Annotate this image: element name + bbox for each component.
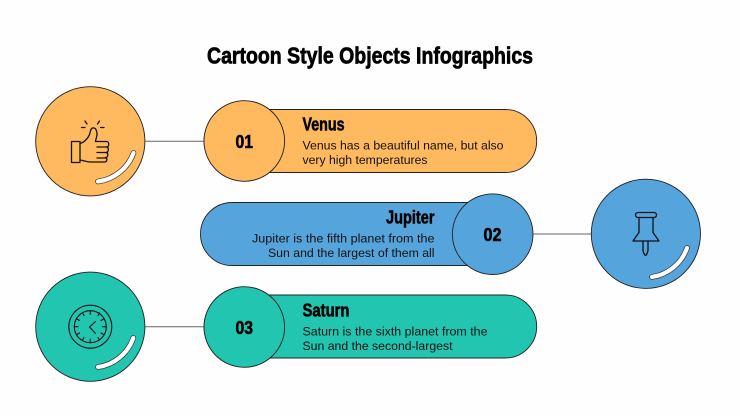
number circle 2 <box>452 194 533 274</box>
number 01: 01 <box>236 131 253 152</box>
icon: push pin <box>633 212 659 256</box>
pill 2 <box>200 202 532 266</box>
body Jupiter: Sun and the largest of them all <box>268 246 434 260</box>
body Saturn: Saturn is the sixth planet from the <box>302 324 488 338</box>
connector 2 <box>532 233 592 235</box>
icon circle 1 <box>36 87 145 196</box>
icon circle 3 <box>36 272 145 381</box>
connector 1 <box>145 140 205 142</box>
item 1: Venus <box>36 87 537 196</box>
heading Venus: Venus <box>302 114 344 134</box>
item 3: Saturn <box>36 272 537 381</box>
body Saturn: Sun and the second-largest <box>302 339 453 353</box>
heading Saturn: Saturn <box>302 300 350 320</box>
connector 3 <box>145 326 205 328</box>
body Venus: Venus has a beautiful name, but also <box>302 138 504 152</box>
icon: clock <box>69 305 112 348</box>
item 2: Jupiter <box>200 179 701 288</box>
body Venus: very high temperatures <box>302 153 428 167</box>
title: Cartoon Style Objects Infographics <box>207 42 533 68</box>
number circle 3 <box>204 287 285 367</box>
icon: thumbs up <box>72 121 109 162</box>
number 02: 02 <box>484 224 502 245</box>
body Jupiter: Jupiter is the fifth planet from the <box>252 232 435 246</box>
icon circle 2 <box>591 179 701 288</box>
pill 1 <box>204 110 537 172</box>
number circle 1 <box>204 101 285 181</box>
pill 3 <box>204 295 537 358</box>
heading Jupiter: Jupiter <box>386 208 434 228</box>
number 03: 03 <box>236 317 253 338</box>
